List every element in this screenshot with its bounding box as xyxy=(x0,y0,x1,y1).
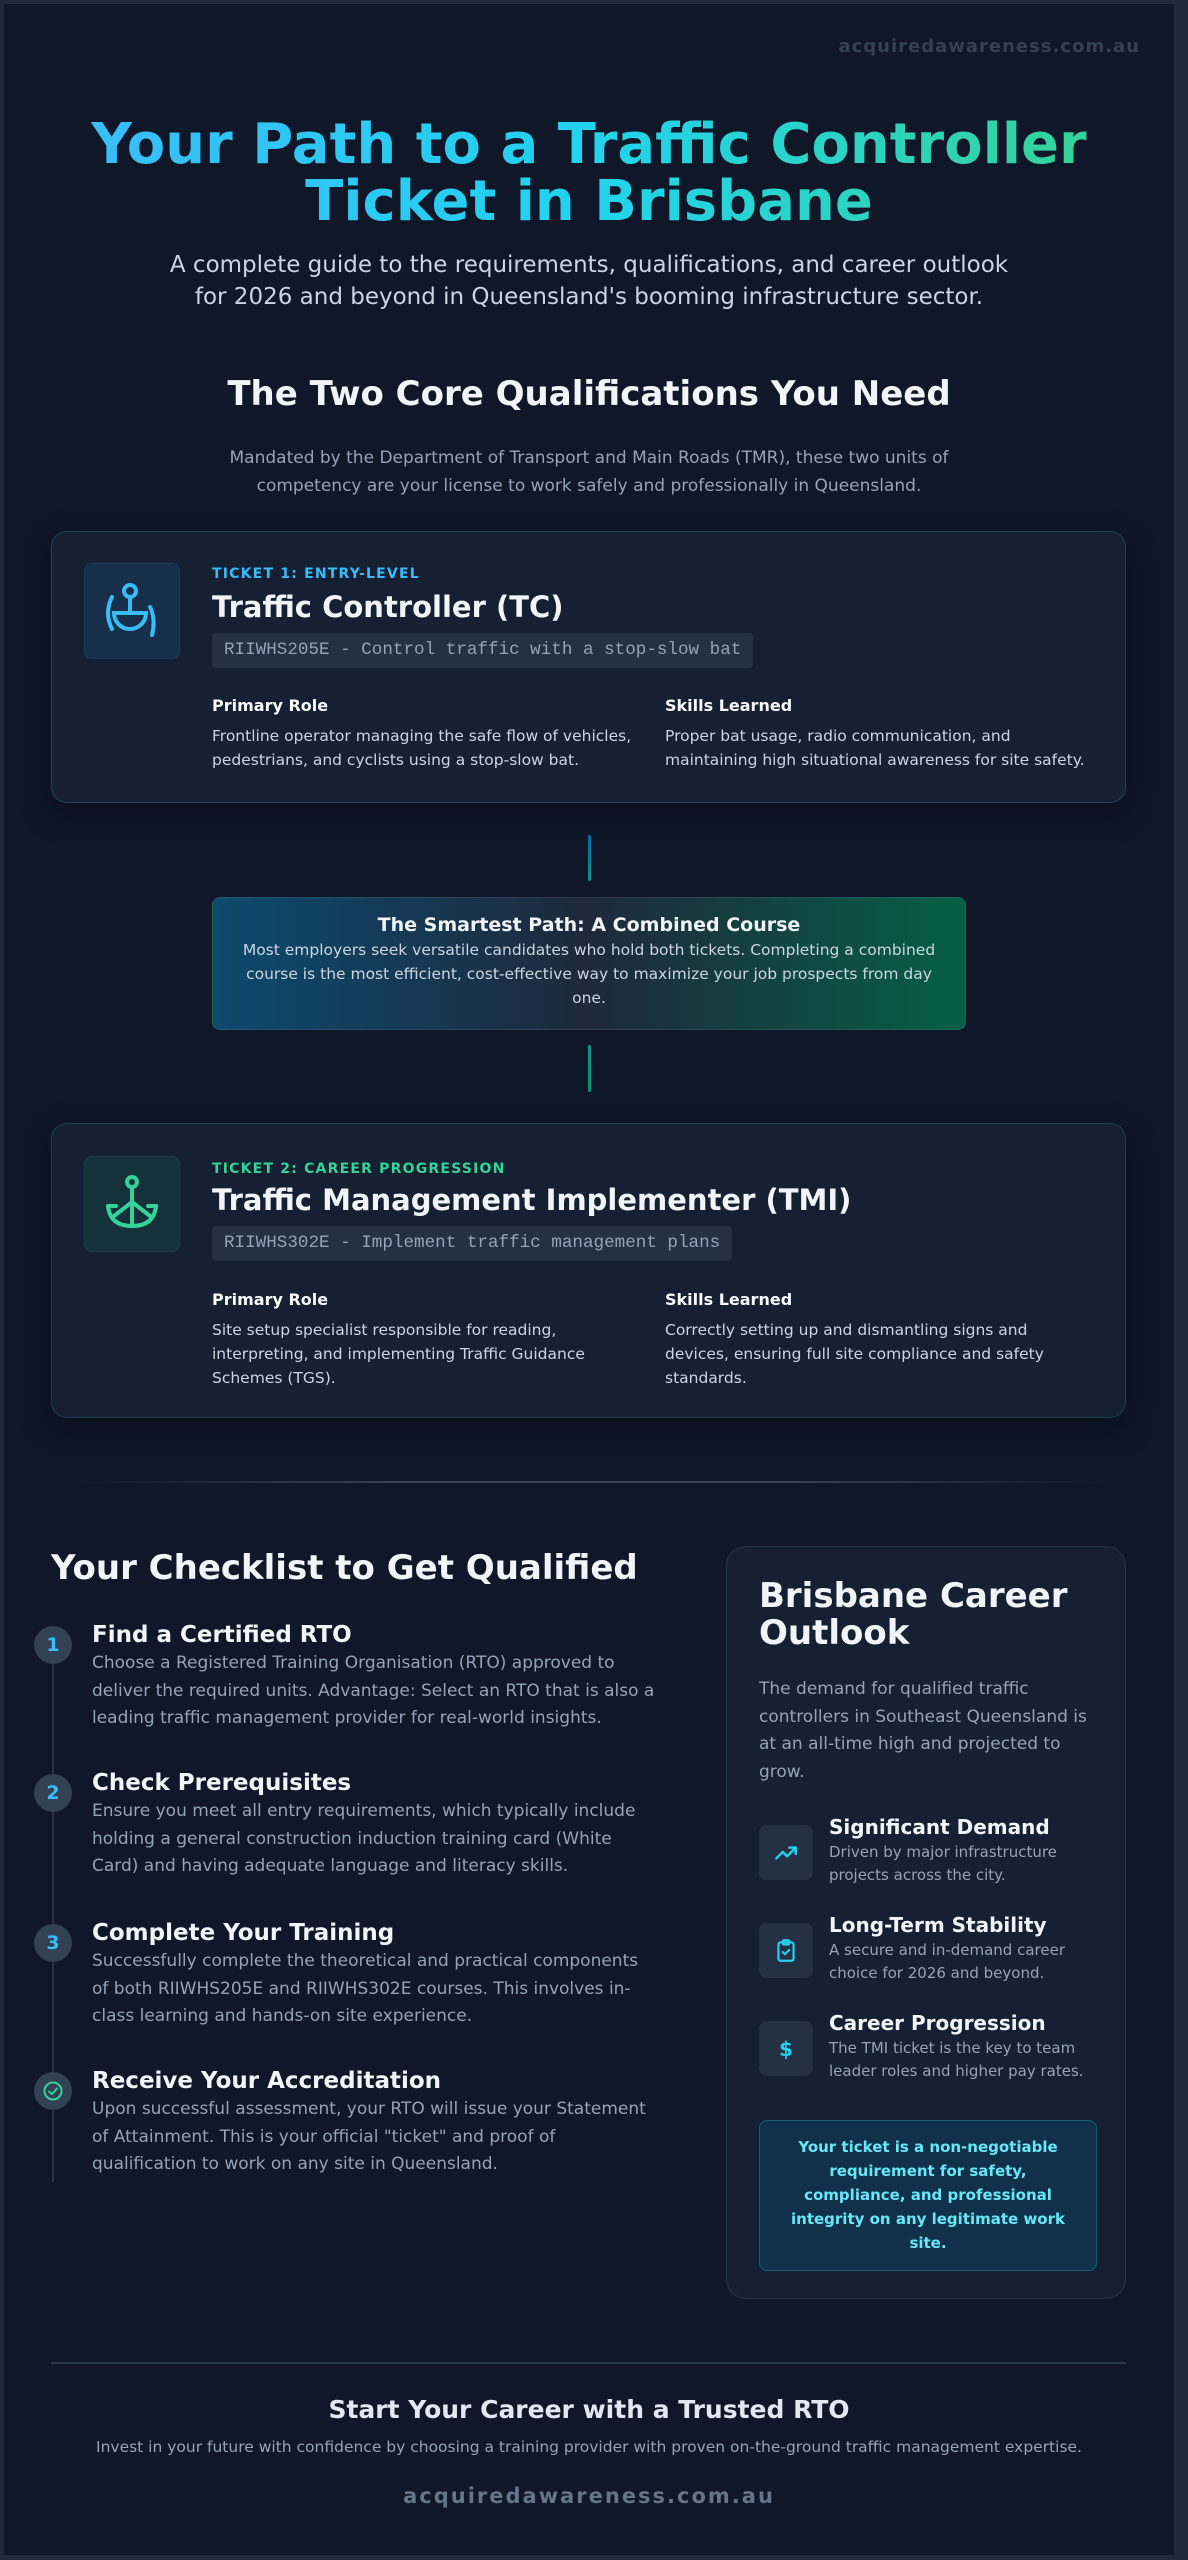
heading: Brisbane Career Outlook xyxy=(759,1576,1068,1653)
arrow connector 1 xyxy=(588,835,591,881)
subtitle xyxy=(170,252,1008,310)
watermark top: acquiredawareness.com.au xyxy=(838,36,1140,57)
footer heading: Start Your Career with a Trusted RTO xyxy=(328,2395,850,2424)
unit code: RIIWHS205E - Control traffic with a stop-slow bat xyxy=(224,640,741,660)
footer text: Invest in your future with confidence by choosing a training provider with proven on-the-ground traffic management expertise. xyxy=(96,2438,1082,2456)
callout: combined course xyxy=(212,897,966,1030)
arrow connector 2 xyxy=(588,1045,591,1092)
label: TICKET 2: CAREER PROGRESSION xyxy=(212,1161,506,1177)
heading: two core qualifications: The Two Core Qualifications You Need xyxy=(227,374,951,414)
step 2: Ensure you meet all entry requirements, which typically include holding a general construction induction training card (White Card) and having adequate language and literacy skills. xyxy=(92,1801,635,1876)
heading: checklist: Your Checklist to Get Qualified xyxy=(51,1548,638,1588)
intro text: Mandated by the Department of Transport and Main Roads (TMR), these two units of competency are your license to work safely and professionally in Queensland. xyxy=(230,448,948,496)
column: primary role xyxy=(212,1290,585,1387)
item: progression: $ xyxy=(779,2036,793,2060)
callout: non-negotiable: Your ticket is a non-negotiable requirement for safety, compliance, and professional integrity on any legitimate work site. xyxy=(791,2138,1065,2252)
panel: career outlook xyxy=(726,1546,1126,2299)
step 4: Receive Your Accreditation xyxy=(92,2068,441,2094)
title xyxy=(91,112,1087,234)
card title: Traffic Management Implementer (TMI) xyxy=(212,1183,851,1217)
item: progression xyxy=(759,2011,1084,2080)
watermark bottom: acquiredawareness.com.au xyxy=(403,2484,775,2508)
item: stability: Long-Term Stability xyxy=(829,1913,1047,1937)
unit code xyxy=(212,633,753,668)
callout: non-negotiable xyxy=(759,2120,1097,2271)
title: Ticket in Brisbane xyxy=(305,169,873,234)
step 2: 2 xyxy=(46,1782,60,1804)
step 1 xyxy=(34,1622,654,1728)
subtitle: for 2026 and beyond in Queensland's booming infrastructure sector. xyxy=(195,284,983,310)
step 1: 1 xyxy=(46,1634,60,1656)
icon: anchor xyxy=(84,1156,180,1252)
column: skills: Correctly setting up and dismantling signs and devices, ensuring full site compliance and safety standards. xyxy=(665,1321,1044,1387)
column: skills xyxy=(665,1290,1044,1387)
step 2 xyxy=(34,1770,635,1876)
column: primary role: Site setup specialist responsible for reading, interpreting, and implementing Traffic Guidance Schemes (TGS). xyxy=(212,1321,585,1387)
card title: Traffic Controller (TC) xyxy=(212,590,564,624)
label: TICKET 1: ENTRY-LEVEL xyxy=(212,566,420,582)
item: demand xyxy=(759,1815,1057,1884)
subtitle: A complete guide to the requirements, qualifications, and career outlook xyxy=(170,252,1008,278)
step 1: Find a Certified RTO xyxy=(92,1622,352,1648)
step 3: 3 xyxy=(46,1932,60,1954)
column: skills: Skills Learned xyxy=(665,1290,792,1309)
step 2: Check Prerequisites xyxy=(92,1770,351,1796)
panel: ticket 2 TMI xyxy=(51,1123,1126,1418)
column: primary role xyxy=(212,696,631,769)
item: demand: Significant Demand xyxy=(829,1815,1050,1839)
column: skills: Skills Learned xyxy=(665,696,792,715)
step 3: Successfully complete the theoretical and practical components of both RIIWHS205E and RIIWHS302E courses. This involves in-class learning and hands-on site experience. xyxy=(92,1951,638,2026)
step 4 xyxy=(34,2068,646,2174)
unit code xyxy=(212,1226,732,1261)
step 3: Complete Your Training xyxy=(92,1920,394,1946)
callout: combined course: The Smartest Path: A Combined Course xyxy=(378,914,800,936)
item: progression: The TMI ticket is the key to team leader roles and higher pay rates. xyxy=(829,2039,1084,2080)
icon: stop-slow bat xyxy=(84,563,180,659)
column: primary role: Frontline operator managing the safe flow of vehicles, pedestrians, and cyclists using a stop-slow bat. xyxy=(212,727,631,769)
panel: ticket 1 TC xyxy=(51,531,1126,803)
description: The demand for qualified traffic controllers in Southeast Queensland is at an all-time high and projected to grow. xyxy=(759,1679,1087,1782)
item: stability xyxy=(759,1913,1066,1982)
item: progression: Career Progression xyxy=(829,2011,1046,2035)
callout: combined course: Most employers seek versatile candidates who hold both tickets. Completing a combined course is the most efficient, cost-effective way to maximize your job prospects from day one. xyxy=(243,941,935,1007)
item: stability: A secure and in-demand career choice for 2026 and beyond. xyxy=(829,1941,1065,1982)
step 1: Choose a Registered Training Organisation (RTO) approved to deliver the required units. Advantage: Select an RTO that is also a leading traffic management provider for real-world insights. xyxy=(92,1653,654,1728)
step 4: Upon successful assessment, your RTO will issue your Statement of Attainment. This is your official "ticket" and proof of qualification to work on any site in Queensland. xyxy=(92,2099,646,2174)
checklist steps xyxy=(34,1622,654,2182)
step 3 xyxy=(34,1920,638,2026)
title: Your Path to a Traffic Controller xyxy=(91,112,1087,177)
column: skills xyxy=(665,696,1085,769)
column: primary role: Primary Role xyxy=(212,696,328,715)
column: primary role: Primary Role xyxy=(212,1290,328,1309)
column: skills: Proper bat usage, radio communication, and maintaining high situational awareness for site safety. xyxy=(665,727,1085,769)
unit code: RIIWHS302E - Implement traffic management plans xyxy=(224,1233,720,1253)
item: demand: Driven by major infrastructure projects across the city. xyxy=(829,1843,1057,1884)
